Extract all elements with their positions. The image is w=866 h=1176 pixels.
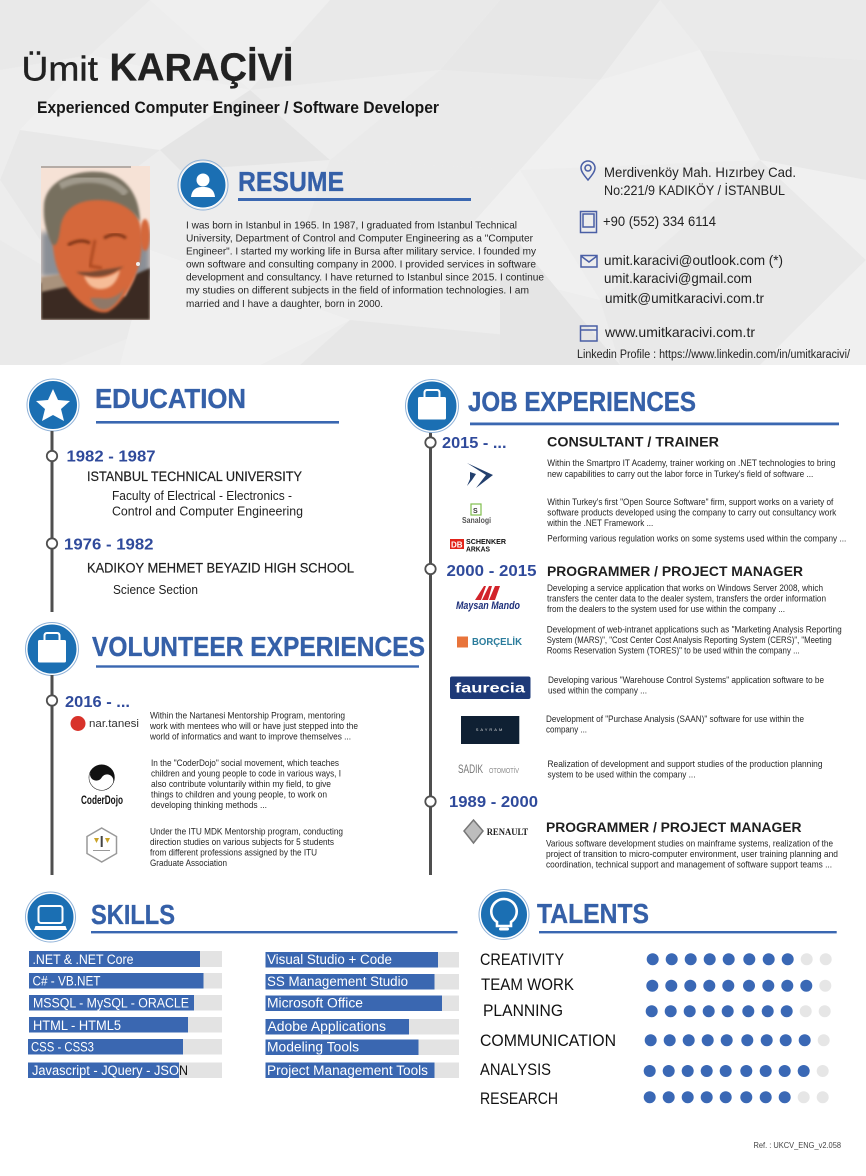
resume body text: I was born in Istanbul in 1965. In 1987, I graduated from Istanbul Technical (186, 220, 517, 232)
heading: job experiences: JOB EXPERIENCES (468, 386, 696, 417)
resume body text: own software and consulting company in 2000. I provided services in software (186, 259, 536, 271)
text: coderdojo (151, 758, 341, 811)
resume body text: University, Department of Control and Computer Engineering as a "Computer (186, 232, 533, 244)
role: consultant trainer: CONSULTANT / TRAINER (547, 434, 719, 450)
skills bars: left column: .NET & .NET Core (32, 952, 134, 967)
address: No:221/9 KADIKÖY / İSTANBUL (604, 181, 785, 198)
talent: team work (481, 975, 831, 994)
talent: planning (483, 1001, 831, 1020)
talent: research: RESEARCH (480, 1089, 558, 1108)
logo: db schenker arkas: DB (451, 540, 463, 550)
text: sayram (546, 714, 804, 736)
logo: db schenker arkas: SCHENKER (466, 537, 507, 546)
title: name: Ümit (22, 50, 99, 88)
icon: laptop (26, 892, 76, 942)
logo: sanalogi (462, 504, 491, 525)
text: sadik (548, 759, 822, 780)
text: sayram: Development of "Purchase Analysis (SAAN)" software for use within the (546, 714, 804, 725)
text: itu mdk: Graduate Association (150, 858, 227, 869)
text: borcelik: Rooms Reservation System (TORES)" to be used within the company ... (547, 646, 800, 656)
talent: creativity: CREATIVITY (480, 950, 564, 969)
skills bars: right column: SS Management Studio (267, 974, 408, 989)
email addresses (604, 252, 783, 306)
logo: sadik otomotiv (458, 762, 519, 776)
skills bars: left column: Javascript - JQuery - JSO (32, 1063, 179, 1078)
text: sadik: system to be used within the company ... (548, 770, 696, 780)
footer reference: Ref. : UKCV_ENG_v2.058 (754, 1141, 842, 1150)
panel: skills (26, 892, 459, 1078)
text: coderdojo: In the "CoderDojo" social movement, which teaches (151, 758, 339, 769)
panel: volunteer experiences (26, 622, 425, 875)
address: Merdivenköy Mah. Hızırbey Cad. (604, 164, 796, 180)
text: sadik: Realization of development and support studies of the production planning (548, 759, 822, 770)
title: name (22, 46, 294, 90)
logo: sayram: SAYRAM (476, 727, 504, 732)
heading: resume: RESUME (238, 166, 344, 197)
logo: nartanesi (70, 716, 139, 731)
text: sanalogi: within the .NET Framework ... (546, 518, 653, 529)
resume body text: married and I have a daughter, born in 2000. (186, 298, 383, 310)
icon: tablet phone (580, 212, 596, 232)
email addresses: umit.karacivi@gmail.com (604, 270, 752, 286)
skills bars: right column: Visual Studio + Code (267, 952, 392, 967)
panel: job experiences (406, 380, 846, 875)
entry: istanbul technical university: Faculty of Electrical - Electronics - (112, 488, 292, 503)
skills bars: left column: MSSQL - MySQL - ORACLE (33, 996, 189, 1010)
logo: itu mdk hexagon (87, 828, 116, 862)
skills bars: left column: C# - VB.NET (32, 974, 100, 988)
entry: istanbul technical university: Control and Computer Engineering (112, 504, 303, 518)
year: 2015: 2015 - ... (442, 435, 506, 452)
text: coderdojo: things to children and young people, to work on (151, 790, 327, 800)
role: programmer project manager: PROGRAMMER / PROJECT MANAGER (547, 564, 803, 579)
text: sayram: company ... (546, 724, 587, 736)
entry: high school (64, 536, 354, 597)
skills bars: right column: Microsoft Office (267, 996, 363, 1010)
text: renault (546, 838, 838, 870)
talent: creativity (480, 950, 832, 969)
phone number: +90 (552) 334 6114 (603, 213, 716, 229)
panel: contact details (577, 161, 851, 361)
logo: coderdojo (81, 765, 123, 807)
resume body text: development and consultancy. I have returned to Istanbul since 2015. I continue (186, 272, 544, 284)
logo: renault (464, 820, 528, 843)
text: faurecia: used within the company ... (548, 686, 647, 696)
talent: communication (480, 1031, 830, 1050)
icon: star (27, 379, 79, 431)
logo: smartpro runner (467, 463, 493, 488)
icon: light bulb (479, 890, 529, 940)
job timeline (425, 432, 436, 875)
skills bars: left column: HTML - HTML5 (33, 1018, 121, 1033)
title: name: KARAÇİVİ (110, 46, 294, 90)
heading: talents: TALENTS (537, 898, 649, 929)
skills bars: left column: CSS - CSS3 (31, 1040, 94, 1054)
panel: education (27, 379, 354, 612)
text: renault: project of transition to micro-computer environment, user training planning and (546, 849, 838, 860)
heading: volunteer experiences: VOLUNTEER EXPERIENCES (92, 631, 425, 662)
subtitle: Experienced Computer Engineer / Software Developer (37, 99, 440, 117)
entry: istanbul technical university: 1982 - 1987 (66, 448, 156, 466)
entry: istanbul technical university (66, 448, 303, 518)
text: nartanesi: world of informatics and want to improve themselves ... (149, 732, 351, 742)
icon: briefcase (26, 622, 78, 676)
text: smartpro (547, 458, 835, 480)
icon: envelope (581, 256, 597, 267)
logo: borcelik: BORÇELİK (472, 635, 522, 648)
skills bars: left column: N (179, 1063, 188, 1078)
text: nartanesi (149, 710, 358, 742)
text: faurecia (548, 675, 824, 696)
address (604, 164, 796, 198)
volunteer timeline (47, 675, 57, 875)
skills bars: right column (266, 952, 459, 1078)
logo: faurecia (450, 676, 530, 699)
icon: location pin (581, 161, 595, 180)
logo: coderdojo: CoderDojo (81, 793, 123, 807)
email addresses: umit.karacivi@outlook.com (*) (604, 252, 783, 268)
talent: planning: PLANNING (483, 1001, 563, 1020)
icon: person (178, 160, 228, 210)
logo: maysan mando (456, 586, 520, 612)
text: coderdojo: developing thinking methods ... (151, 800, 267, 811)
skills bars: left column (28, 951, 222, 1078)
text: maysan: from the dealers to the system used for use within the company ... (547, 604, 785, 615)
email addresses: umitk@umitkaracivi.com.tr (605, 290, 764, 306)
entry: high school: KADIKOY MEHMET BEYAZID HIGH SCHOOL (87, 560, 354, 576)
resume body text (186, 220, 544, 310)
heading: education: EDUCATION (95, 383, 246, 414)
heading: skills: SKILLS (91, 899, 175, 930)
logo: db schenker arkas (450, 537, 507, 554)
talent: team work: TEAM WORK (481, 975, 575, 994)
text: maysan: transfers the center data to the dealer system, transfers the order information (547, 594, 826, 604)
resume body text: Engineer". I started my working life in Bursa after military service. I founded my (186, 246, 537, 258)
resume body text: my studies on different subjects in the field of information technologies. I am (186, 285, 529, 297)
logo: db schenker arkas: ARKAS (466, 544, 490, 554)
role: programmer project manager: PROGRAMMER / PROJECT MANAGER (546, 820, 802, 835)
panel: talents (479, 890, 837, 1108)
skills bars: right column: Project Management Tools (267, 1063, 428, 1078)
logo: maysan mando: Maysan Mando (456, 600, 520, 612)
text: renault: coordination, technical support and management of software support teams ... (546, 860, 832, 870)
talent: research (480, 1089, 829, 1108)
logo: sanalogi: Sanalogi (462, 516, 491, 525)
skills bars: right column: Adobe Applications (268, 1019, 386, 1034)
text: nartanesi: work with mentees who will or have just stepped into the (149, 721, 358, 732)
text: itu mdk: from different professions assigned by the ITU (150, 848, 317, 858)
icon: browser window (580, 326, 597, 341)
year: 2016: 2016 - ... (65, 694, 130, 711)
logo: sanalogi: S (473, 508, 478, 515)
header background: low-poly grey panel (0, 0, 866, 365)
logo: sadik otomotiv: SADIK (458, 762, 483, 776)
text: itu mdk (150, 826, 343, 869)
linkedin: Linkedin Profile : https://www.linkedin.com/in/umitkaracivi/ (577, 349, 851, 361)
skills bars: right column: Modeling Tools (267, 1040, 359, 1054)
text: smartpro: new capabilities to carry out the labor force in Turkey's field of software ... (547, 469, 813, 480)
text: sanalogi (546, 497, 837, 529)
logo: sayram (461, 716, 519, 744)
logo: borcelik (457, 635, 522, 648)
text: coderdojo: also contribute voluntarily within my field, to give (151, 779, 331, 790)
logo: faurecia: faurecia (455, 680, 526, 696)
logo: renault: RENAULT (487, 827, 528, 837)
talent: analysis (480, 1060, 829, 1079)
text: coderdojo: children and young people to code in various ways, I (151, 768, 341, 780)
entry: high school: 1976 - 1982 (64, 536, 154, 554)
text: maysan: Developing a service application that works on Windows Server 2008, which (547, 583, 823, 594)
portrait photo (41, 166, 150, 320)
text: maysan (547, 583, 826, 615)
logo: nartanesi: nar.tanesi (89, 718, 139, 730)
talent: communication: COMMUNICATION (480, 1031, 616, 1050)
education timeline (47, 431, 57, 612)
logo: sadik otomotiv: OTOMOTİV (489, 766, 519, 775)
website: www.umitkaracivi.com.tr (604, 324, 755, 340)
text: borcelik (547, 624, 842, 656)
icon: briefcase (406, 380, 458, 432)
panel: resume (178, 160, 544, 310)
text: itu mdk: direction studies on various subjects for 5 students (150, 837, 334, 848)
entry: istanbul technical university: ISTANBUL TECHNICAL UNIVERSITY (87, 469, 302, 484)
text: nartanesi: Within the Nartanesi Mentorship Program, mentoring (150, 710, 345, 722)
year: 1989-2000: 1989 - 2000 (449, 794, 538, 811)
text: faurecia: Developing various "Warehouse Control Systems" application software to be (548, 675, 824, 686)
entry: high school: Science Section (113, 583, 198, 597)
talent: analysis: ANALYSIS (480, 1060, 551, 1079)
year: 2000-2015: 2000 - 2015 (446, 563, 537, 580)
text: itu mdk: Under the ITU MDK Mentorship program, conducting (150, 826, 343, 838)
